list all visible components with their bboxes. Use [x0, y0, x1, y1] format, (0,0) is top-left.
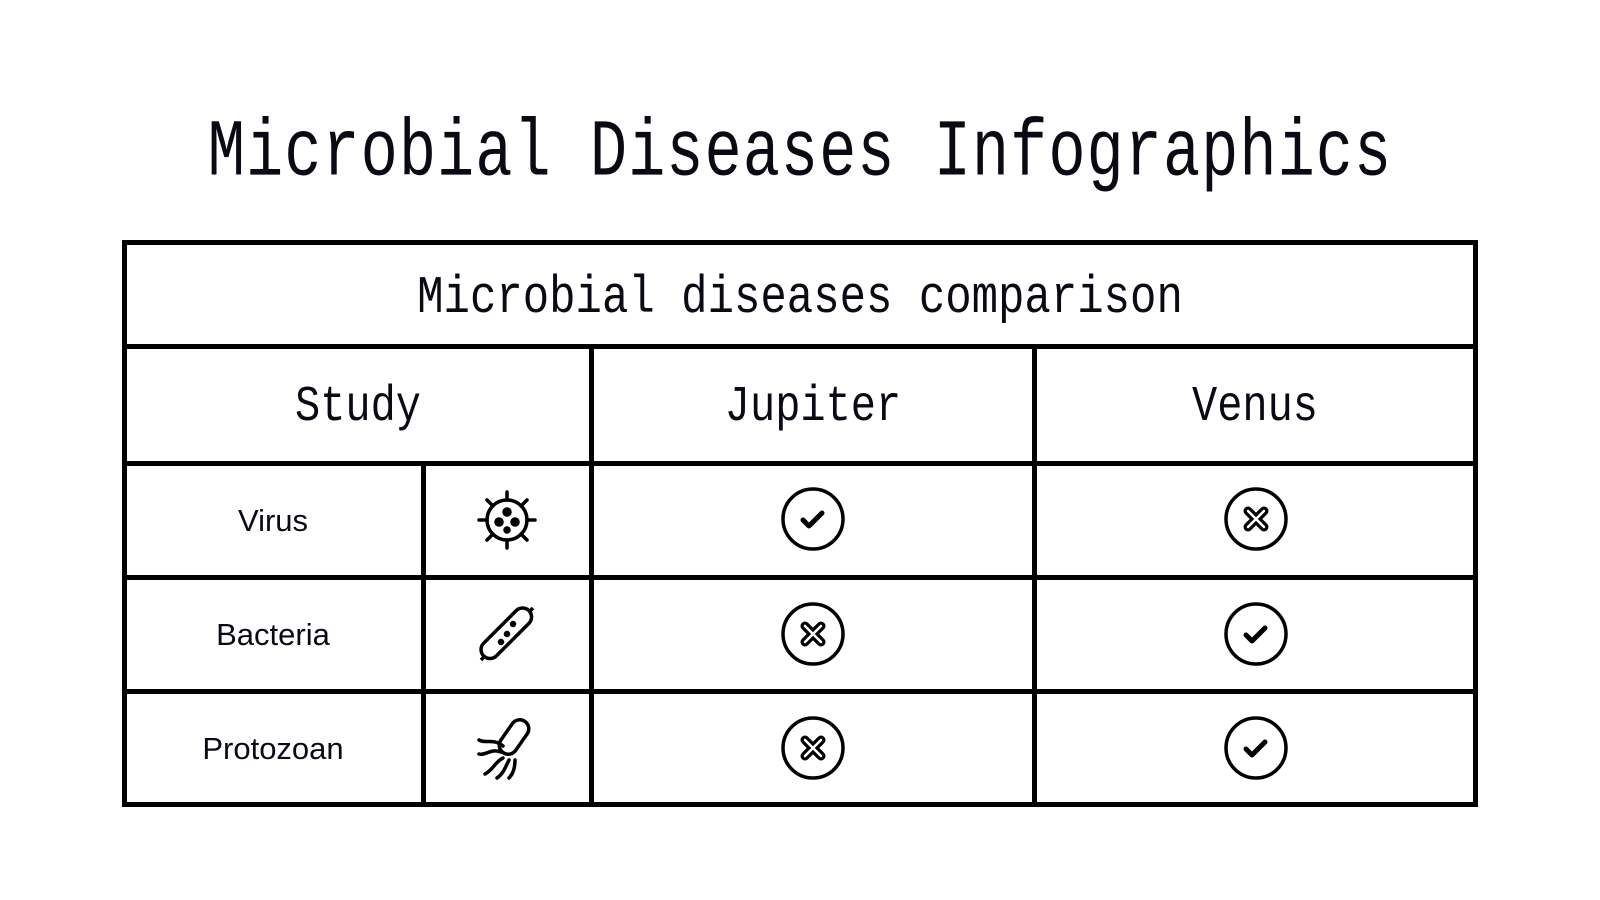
icon: virus [477, 490, 537, 550]
subtitle: Microbial diseases comparison [417, 269, 1183, 329]
title: Microbial Diseases Infographics [208, 107, 1392, 199]
header: Jupiter: Jupiter [725, 378, 901, 436]
header: Study: Study [295, 378, 421, 436]
icon: bacteria [479, 606, 534, 662]
icon: protozoan [477, 718, 530, 780]
label: Bacteria: Bacteria [216, 617, 330, 652]
label: Protozoan: Protozoan [202, 731, 344, 766]
label: Virus: Virus [238, 503, 308, 538]
header: Venus: Venus [1192, 378, 1318, 436]
